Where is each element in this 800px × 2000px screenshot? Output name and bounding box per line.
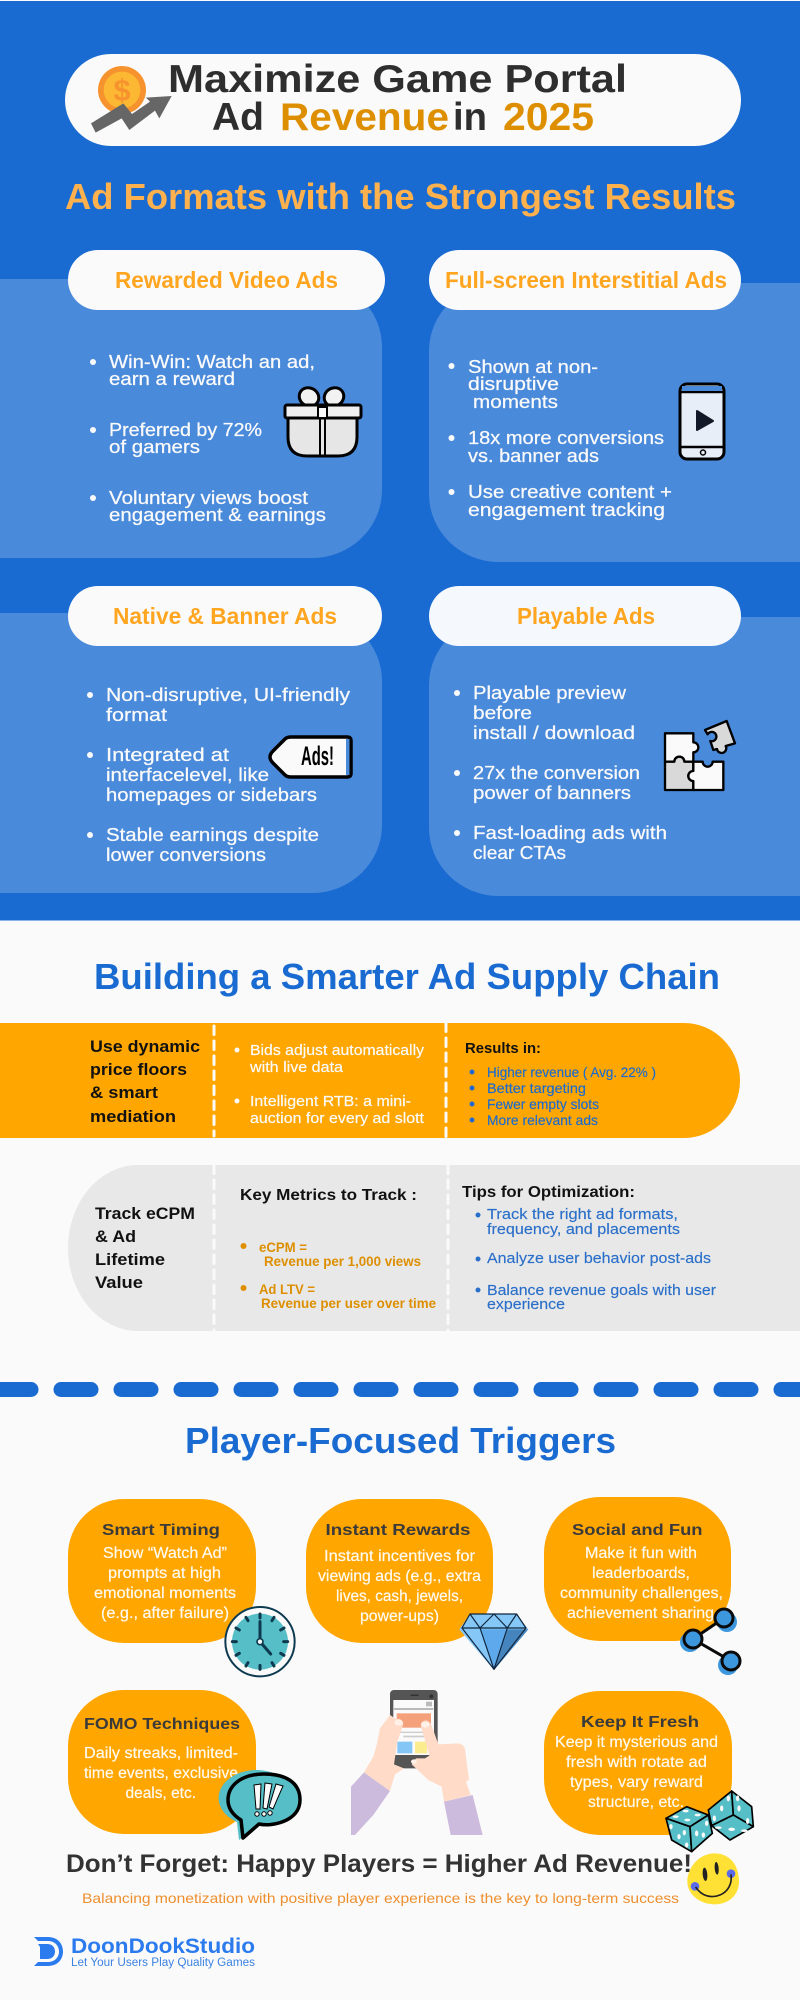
panel: full-screen interstitial ads xyxy=(429,250,800,562)
bullet list: Integrated at xyxy=(106,745,229,765)
icon: clock xyxy=(225,1607,295,1676)
card text: community challenges, xyxy=(560,1585,723,1602)
label: dynamic price floors: mediation xyxy=(90,1107,176,1126)
panel: native and banner ads xyxy=(0,586,382,893)
card title: Smart Timing xyxy=(102,1522,220,1539)
heading: ad formats: Ad Formats with the Strongest Results xyxy=(65,176,736,217)
card text: prompts at high xyxy=(108,1565,221,1582)
panel: track ecpm bar xyxy=(68,1165,800,1331)
card text: lives, cash, jewels, xyxy=(336,1588,463,1605)
card: instant rewards xyxy=(306,1499,528,1670)
card title: Keep It Fresh xyxy=(581,1714,699,1731)
results list: Results in: xyxy=(465,1040,541,1057)
card: social and fun xyxy=(544,1497,740,1675)
icon: coin with rising arrow: $ xyxy=(113,74,131,108)
title text xyxy=(168,58,627,139)
card text xyxy=(318,1548,481,1625)
card title: Social and Fun xyxy=(572,1522,702,1539)
icon: puzzle pieces xyxy=(665,721,735,790)
panel: playable ads xyxy=(429,586,800,896)
title text: in xyxy=(453,96,487,139)
icon: share nodes xyxy=(680,1609,740,1675)
panel heading: Playable Ads xyxy=(517,603,655,629)
label: track ecpm: Value xyxy=(95,1273,143,1292)
icon: phone with play button xyxy=(680,384,724,459)
heading: player-focused triggers: Player-Focused Triggers xyxy=(185,1420,616,1461)
icon: smiley xyxy=(687,1853,739,1904)
bullet list: bids xyxy=(234,1042,425,1127)
results list: Better targeting xyxy=(487,1080,586,1096)
bullet list: bids: Intelligent RTB: a mini- xyxy=(250,1093,411,1110)
tips list: Track the right ad formats, xyxy=(487,1206,678,1223)
card text: Keep it mysterious and xyxy=(555,1734,718,1751)
card text xyxy=(84,1745,238,1802)
icon: gift box xyxy=(285,384,361,456)
label: dynamic price floors: Use dynamic xyxy=(90,1037,200,1056)
bullet list xyxy=(454,683,667,863)
panel heading: Native & Banner Ads xyxy=(113,603,337,629)
bullet list: Fast-loading ads with xyxy=(473,823,667,843)
card text: (e.g., after failure) xyxy=(101,1605,229,1622)
icon: D logo xyxy=(34,1937,63,1966)
bullet list: moments xyxy=(473,392,558,412)
results list xyxy=(465,1040,656,1128)
card text: Show “Watch Ad” xyxy=(103,1545,227,1562)
bullet list: bids: auction for every ad slott xyxy=(250,1110,425,1127)
icon: coin with rising arrow xyxy=(91,66,172,133)
bullet list: Non-disruptive, UI-friendly xyxy=(106,685,350,705)
tips list: Tips for Optimization: xyxy=(462,1184,635,1201)
label: dynamic price floors: & smart xyxy=(90,1083,158,1102)
title banner xyxy=(65,54,741,146)
bullet list: engagement tracking xyxy=(468,500,665,520)
bullet list: bids: Bids adjust automatically xyxy=(250,1042,425,1059)
callout: don't forget xyxy=(66,1850,739,1906)
card text: viewing ads (e.g., extra xyxy=(318,1568,481,1585)
title text: Ad xyxy=(212,96,264,139)
bullet list: before xyxy=(473,703,532,723)
key metrics list: eCPM = xyxy=(259,1239,307,1255)
bullet list: engagement & earnings xyxy=(109,505,326,525)
card text: leaderboards, xyxy=(592,1565,690,1582)
bullet list: Shown at non- xyxy=(468,357,598,377)
card: fomo techniques xyxy=(68,1690,300,1840)
tips list xyxy=(462,1184,716,1313)
tips list: frequency, and placements xyxy=(487,1221,680,1238)
results list: Higher revenue ( Avg. 22% ) xyxy=(487,1064,656,1080)
key metrics list xyxy=(240,1187,436,1311)
icon: ads tag xyxy=(270,737,351,777)
icon: diamond xyxy=(459,1614,528,1670)
bullet list: vs. banner ads xyxy=(468,446,599,466)
label: track ecpm: Track eCPM xyxy=(95,1204,195,1223)
label: track ecpm xyxy=(95,1204,195,1292)
title text: 2025 xyxy=(503,96,594,139)
results list: Fewer empty slots xyxy=(487,1096,599,1112)
label: dynamic price floors xyxy=(90,1037,200,1126)
bullet list: install / download xyxy=(473,723,635,743)
bullet list: interfacelevel, like xyxy=(106,765,269,785)
bullet list: Win-Win: Watch an ad, xyxy=(109,352,315,372)
key metrics list: Key Metrics to Track : xyxy=(240,1187,417,1204)
card text: deals, etc. xyxy=(126,1785,196,1802)
title text: Maximize Game Portal xyxy=(168,58,627,101)
results list: More relevant ads xyxy=(487,1112,598,1128)
bullet list: 27x the conversion xyxy=(473,763,640,783)
card text xyxy=(560,1545,723,1622)
card title: FOMO Techniques xyxy=(84,1716,240,1733)
bullet list: Voluntary views boost xyxy=(109,488,308,508)
bullet list: lower conversions xyxy=(106,845,266,865)
heading: smarter ad supply chain: Building a Smarter Ad Supply Chain xyxy=(94,956,720,997)
title text: Revenue xyxy=(280,96,449,139)
brand name: DoonDookStudio xyxy=(71,1935,255,1958)
bullet list: Stable earnings despite xyxy=(106,825,319,845)
key metrics list: Revenue per user over time xyxy=(261,1295,436,1311)
card text: Make it fun with xyxy=(585,1545,697,1562)
card text: time events, exclusive xyxy=(84,1765,238,1782)
footer: logo xyxy=(34,1935,255,1969)
bullet list: Preferred by 72% xyxy=(109,420,262,440)
key metrics list: Ad LTV = xyxy=(259,1281,315,1297)
card text xyxy=(555,1734,718,1811)
bullet list: homepages or sidebars xyxy=(106,785,317,805)
card text: Daily streaks, limited- xyxy=(84,1745,238,1762)
label: track ecpm: Lifetime xyxy=(95,1250,165,1269)
tips list: Balance revenue goals with user xyxy=(487,1282,716,1299)
bullet list xyxy=(90,352,326,525)
label: track ecpm: & Ad xyxy=(95,1227,136,1246)
card: smart timing xyxy=(68,1499,295,1676)
card text: types, vary reward xyxy=(570,1774,703,1791)
label: dynamic price floors: price floors xyxy=(90,1060,187,1079)
panel: dynamic price floors bar xyxy=(0,1023,740,1138)
panel heading: Rewarded Video Ads xyxy=(115,267,338,293)
bullet list: clear CTAs xyxy=(473,843,566,863)
key metrics list: Revenue per 1,000 views xyxy=(264,1253,421,1269)
card text: Instant incentives for xyxy=(324,1548,475,1565)
card text: structure, etc. xyxy=(588,1794,684,1811)
card text: achievement sharing xyxy=(567,1605,714,1622)
bullet list: earn a reward xyxy=(109,369,235,389)
icon: dice xyxy=(666,1791,753,1852)
card text: emotional moments xyxy=(94,1585,236,1602)
icon: speech bubble with exclamation marks xyxy=(219,1770,300,1840)
panel: rewarded video ads xyxy=(0,250,385,558)
bullet list: format xyxy=(106,705,167,725)
bullet list: of gamers xyxy=(109,437,200,457)
bullet list: disruptive xyxy=(468,374,559,394)
illustration: hands holding phone xyxy=(351,1690,483,1835)
bullet list xyxy=(87,685,350,865)
callout: don't forget: Don’t Forget: Happy Players = Higher Ad Revenue! xyxy=(66,1850,692,1878)
subtext: Balancing monetization with positive player experience is the key to long-term success xyxy=(82,1890,679,1906)
bullet list xyxy=(448,357,672,520)
card: keep it fresh xyxy=(544,1691,753,1852)
bullet list: Use creative content + xyxy=(468,482,672,502)
panel heading: Full-screen Interstitial Ads xyxy=(445,267,727,293)
tagline: Let Your Users Play Quality Games xyxy=(71,1957,255,1969)
icon: ads tag: Ads! xyxy=(301,741,334,771)
bullet list: 18x more conversions xyxy=(468,428,664,448)
bullet list: Playable preview xyxy=(473,683,627,703)
bullet list: bids: with live data xyxy=(249,1059,344,1076)
card title: Instant Rewards xyxy=(326,1522,471,1539)
bullet list: power of banners xyxy=(473,783,631,803)
tips list: experience xyxy=(487,1296,565,1313)
card text: fresh with rotate ad xyxy=(566,1754,707,1771)
card text xyxy=(94,1545,236,1622)
card text: power-ups) xyxy=(360,1608,439,1625)
tips list: Analyze user behavior post-ads xyxy=(487,1250,711,1267)
